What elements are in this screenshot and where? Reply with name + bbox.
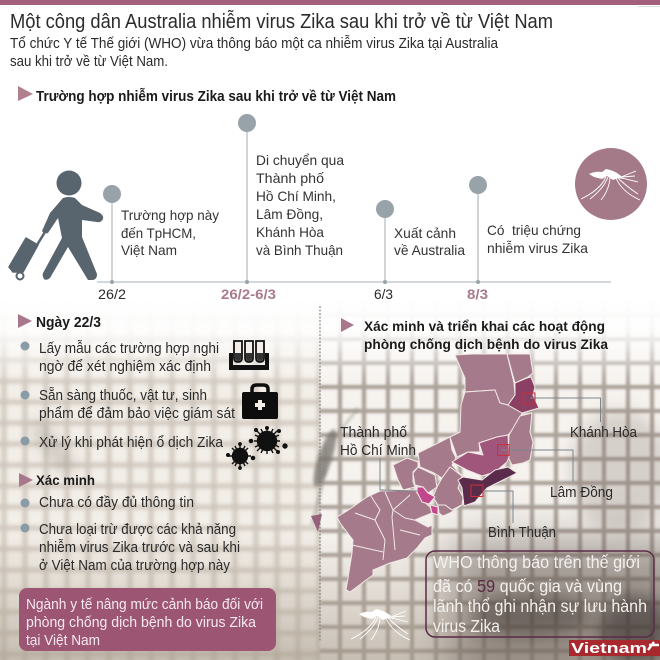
- dates: 26/2: [98, 286, 126, 302]
- event: arrival: đến TpHCM,: [121, 225, 196, 241]
- callout: alert level: tại Việt Nam: [26, 632, 100, 649]
- icon: traveller with suitcase: [9, 170, 103, 280]
- intro text: sau khi trở về từ Việt Nam.: [10, 54, 168, 70]
- dates: 26/2-6/3: [221, 286, 276, 302]
- panel: verification: [19, 473, 240, 574]
- intro text: Tổ chức Y tế Thế giới (WHO) vừa thông báo một ca nhiễm virus Zika tại Australia: [10, 35, 499, 52]
- heading: Xác minh: Xác minh: [36, 473, 95, 488]
- event: travel: Hồ Chí Minh,: [256, 188, 336, 204]
- title: Một công dân Australia nhiễm virus Zika sau khi trở về từ Việt Nam: [10, 10, 553, 33]
- heading: verification and response: phòng chống dịch bệnh do virus Zika: [364, 336, 608, 352]
- event: arrival: Trường hợp này: [121, 207, 219, 223]
- bullet list: [20, 495, 240, 574]
- event: symptoms: Có triệu chứng: [487, 222, 581, 238]
- event: travel: [256, 152, 344, 258]
- callout: alert level: [19, 588, 276, 651]
- event: travel: Khánh Hòa: [256, 224, 324, 240]
- timeline chart: [97, 114, 611, 302]
- bullet list: ở Việt Nam của trường hợp này: [39, 558, 231, 574]
- callout: WHO 59 countries: WHO thông báo trên thế giới: [433, 552, 640, 572]
- map: southern Vietnam: [337, 354, 600, 592]
- callout: WHO 59 countries: virus Zika: [433, 616, 500, 636]
- event: travel: Di chuyển qua: [256, 152, 344, 168]
- bullet list: ngờ để xét nghiệm xác định: [39, 359, 211, 375]
- event: symptoms: nhiễm virus Zika: [487, 240, 588, 256]
- bullet list: Lấy mẫu các trường hợp nghi: [39, 340, 219, 357]
- event: departure: Xuất cảnh: [394, 225, 456, 241]
- callout: alert level: phòng chống dịch bệnh do virus Zika: [26, 614, 257, 631]
- icon: white mosquito: [351, 609, 410, 640]
- icon: test tubes: [229, 341, 269, 370]
- callout: WHO 59 countries: [426, 551, 654, 637]
- divider: [319, 306, 321, 642]
- event: travel: Thành phố: [256, 170, 324, 186]
- icon: virus particles: [227, 427, 287, 469]
- icon: medical kit: [242, 385, 278, 419]
- top-right rule: [638, 6, 660, 8]
- region: southern provinces base: [337, 354, 533, 592]
- map labels: Hồ Chí Minh: [340, 443, 416, 459]
- event: departure: [394, 225, 465, 258]
- bullet list: phẩm để đảm bảo việc giám sát: [39, 406, 235, 422]
- icon: mosquito in circle: [575, 148, 647, 220]
- event: travel: và Bình Thuận: [256, 242, 343, 258]
- map labels: Lâm Đồng: [550, 485, 613, 501]
- logo: Vietnam+: Vietnam: [571, 640, 647, 657]
- event: departure: về Australia: [394, 242, 465, 258]
- callout: WHO 59 countries: lãnh thổ ghi nhận sự lưu hành: [433, 596, 647, 616]
- heading: verification and response: Xác minh và triển khai các hoạt động: [364, 318, 605, 334]
- map labels: [340, 425, 638, 541]
- map labels: Khánh Hòa: [570, 425, 638, 441]
- callout: WHO 59 countries: đã có 59 quốc gia và vùng: [433, 576, 622, 596]
- region: Khánh Hòa: [508, 377, 539, 413]
- intro text: [10, 35, 499, 70]
- bullet list: Chưa có đầy đủ thông tin: [39, 495, 194, 511]
- event: symptoms: [487, 222, 588, 256]
- background: blurred mosquito net photo: [0, 295, 660, 660]
- region: Bình Thuận: [458, 467, 517, 506]
- map labels: Thành phố: [340, 425, 407, 441]
- event: arrival: [121, 207, 219, 258]
- region: Lâm Đồng: [452, 435, 509, 476]
- heading: timeline: Trường hợp nhiễm virus Zika sau khi trở về từ Việt Nam: [36, 88, 396, 105]
- region: Hồ Chí Minh: [417, 487, 438, 515]
- heading: verification and response: [341, 318, 608, 352]
- dates: 8/3: [467, 286, 488, 302]
- bullet list: Sẵn sàng thuốc, vật tư, sinh: [39, 387, 207, 404]
- bullet list: nhiễm virus Zika trước và sau khi: [39, 539, 240, 556]
- panel: day 22/3: [18, 314, 287, 469]
- callout: alert level: Ngành y tế nâng mức cảnh báo đối với: [26, 596, 263, 613]
- dates: 6/3: [374, 286, 393, 302]
- logo: Vietnam+: [569, 640, 660, 657]
- bullet list: [20, 340, 235, 451]
- bullet list: Chưa loại trừ được các khả năng: [39, 522, 236, 538]
- event: travel: Lâm Đồng,: [256, 206, 323, 222]
- Mekong delta internal borders: [352, 492, 428, 560]
- dates: [98, 286, 488, 302]
- bullet list: Xử lý khi phát hiện ổ dịch Zika: [39, 435, 224, 451]
- heading: Ngày 22/3: Ngày 22/3: [36, 315, 101, 331]
- top bar: [0, 0, 660, 5]
- event: arrival: Việt Nam: [121, 242, 177, 258]
- map labels: Bình Thuận: [488, 525, 556, 541]
- marker squares and connector lines: [380, 393, 600, 523]
